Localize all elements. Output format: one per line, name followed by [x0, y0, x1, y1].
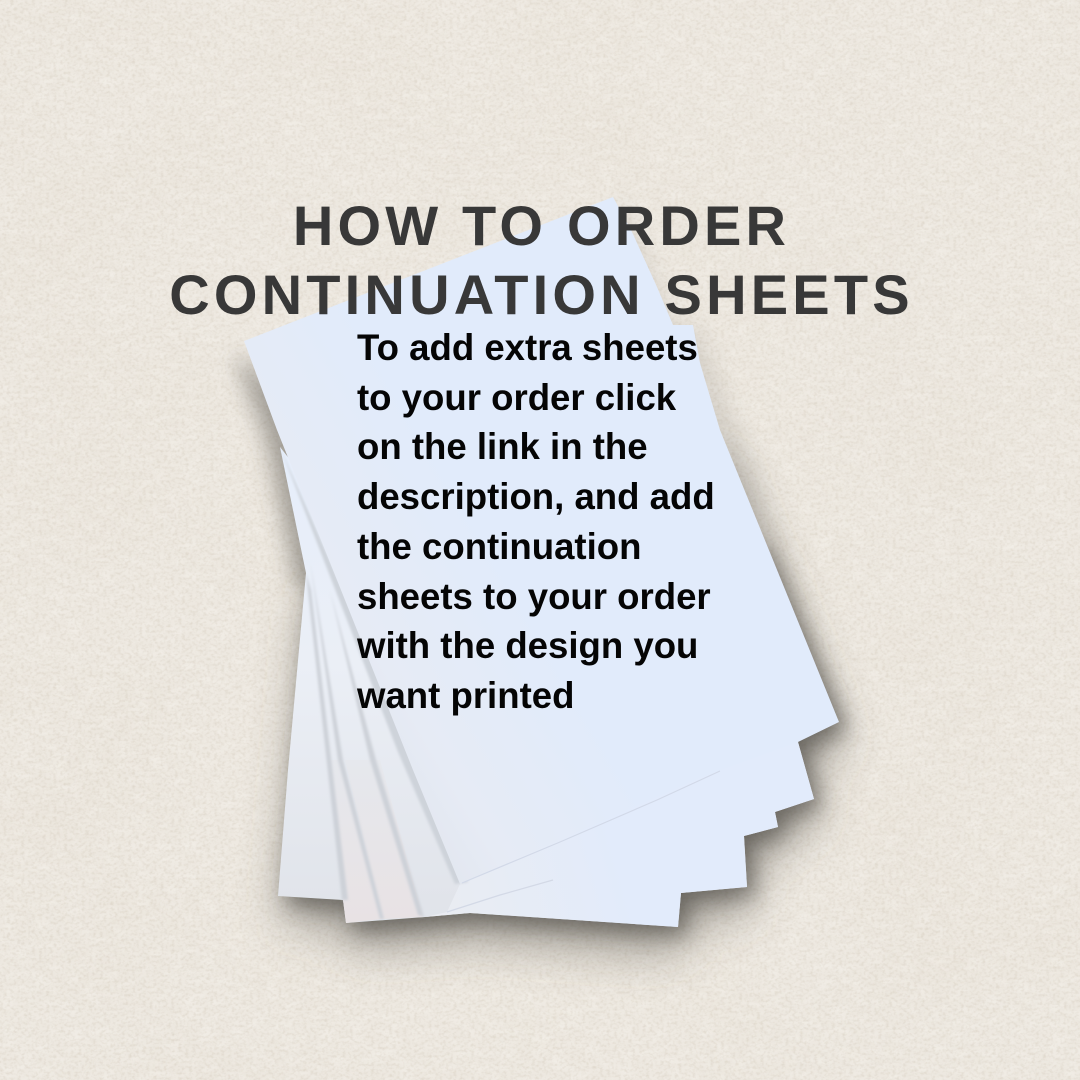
crease line of second sheet	[447, 880, 553, 912]
shadow band along top sheet	[280, 447, 468, 884]
body text: description, and add	[357, 476, 715, 517]
body text: sheets to your order	[357, 576, 711, 617]
pink lower fan sheets	[330, 760, 382, 923]
body text	[356, 327, 715, 716]
lower sheets silhouette	[278, 447, 814, 927]
body text: To add extra sheets	[357, 327, 698, 368]
crease line of top sheet	[462, 771, 720, 883]
fan sheet edge shadows	[306, 560, 424, 919]
title	[169, 194, 914, 326]
body text: want printed	[357, 675, 574, 716]
body text: the continuation	[357, 526, 641, 567]
top sheet	[244, 197, 839, 884]
stack of sheets	[278, 447, 814, 927]
lower right sheet	[425, 700, 814, 927]
body text: to your order click	[357, 377, 676, 418]
body text: with the design you	[357, 625, 698, 666]
shadow under sheets	[234, 201, 847, 953]
body text: on the link in the	[357, 426, 648, 467]
title: HOW TO ORDER	[293, 194, 790, 257]
title: CONTINUATION SHEETS	[169, 262, 914, 326]
